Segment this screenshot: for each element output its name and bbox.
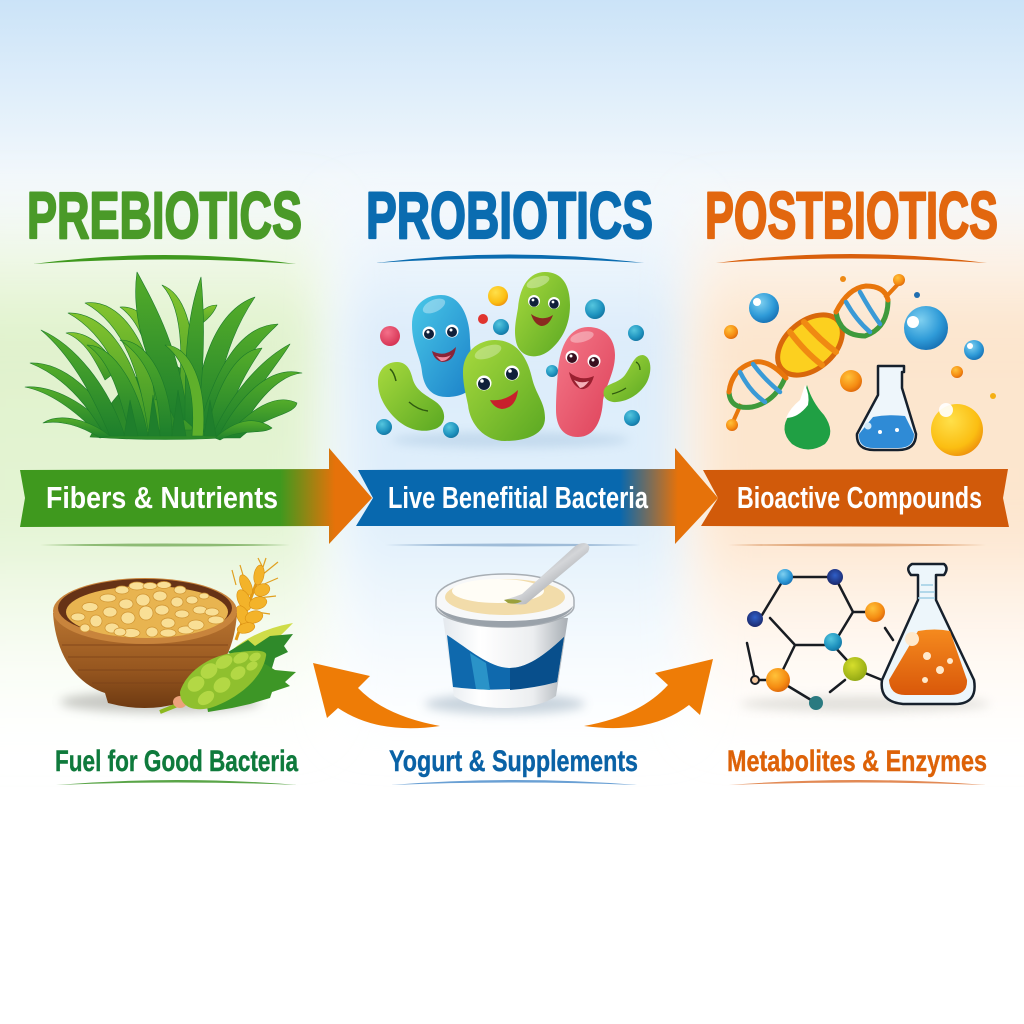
wooden bowl: [53, 613, 237, 708]
background sky gradient: [0, 0, 1024, 300]
panel background: blue: [340, 190, 690, 750]
bubbles: [724, 274, 996, 456]
small particles: [376, 286, 644, 438]
heading underline: [716, 254, 987, 263]
divider: [385, 544, 640, 546]
dna sticks: [732, 283, 899, 424]
icon: smiling bacteria: [376, 272, 650, 448]
banner: fibers and nutrients: Fibers & Nutrients: [46, 480, 278, 515]
icon: dna helix, drop, flask and bubbles: [724, 274, 996, 456]
label underline: [391, 780, 637, 785]
panel: postbiotics: [701, 178, 1009, 785]
wheat ear: [232, 558, 278, 640]
panel background: green: [0, 190, 325, 750]
banner: fibers and nutrients: [20, 448, 372, 544]
heading underline: [33, 255, 296, 264]
leaves: [232, 623, 293, 650]
banner: bioactive compounds: [701, 469, 1009, 527]
oats: [71, 582, 224, 638]
flask: [857, 366, 916, 450]
bacterium: red: [556, 327, 615, 437]
panel background: orange: [695, 190, 1024, 750]
heading: probiotics: PROBIOTICS: [366, 178, 653, 252]
icon: grass: [25, 272, 302, 440]
icon: bowl of oats with wheat and hop: [53, 558, 296, 713]
banner: live beneficial bacteria: [356, 448, 718, 544]
banner: live beneficial bacteria: Live Benefitial Bacteria: [388, 480, 649, 515]
bacterium: left curved green: [378, 362, 444, 431]
label underline: [729, 780, 986, 785]
bacterium: lime top: [515, 272, 570, 356]
green drop: [784, 385, 830, 450]
label underline: [56, 780, 297, 785]
heading: prebiotics: PREBIOTICS: [27, 178, 302, 252]
hop cone: [180, 650, 266, 709]
label: yogurt and supplements: Yogurt & Supplements: [389, 745, 638, 778]
dna helix: [729, 286, 888, 407]
flask with orange liquid: [882, 564, 975, 704]
divider: [40, 544, 290, 546]
panel: prebiotics: [20, 178, 372, 785]
icon: molecule structure: [740, 564, 990, 712]
arrow: curved left to prebiotics: [313, 663, 440, 728]
bacterium: right curved green: [603, 355, 650, 402]
label: fuel for good bacteria: Fuel for Good Bacteria: [55, 745, 298, 778]
panel: probiotics: [313, 178, 718, 785]
icon: yogurt cup with spoon: [425, 543, 589, 714]
heading underline: [376, 254, 644, 263]
bacterium: large green: [463, 340, 545, 441]
divider: [728, 544, 986, 546]
bacterium: blue: [412, 295, 474, 397]
arrow: curved right to postbiotics: [584, 659, 713, 728]
